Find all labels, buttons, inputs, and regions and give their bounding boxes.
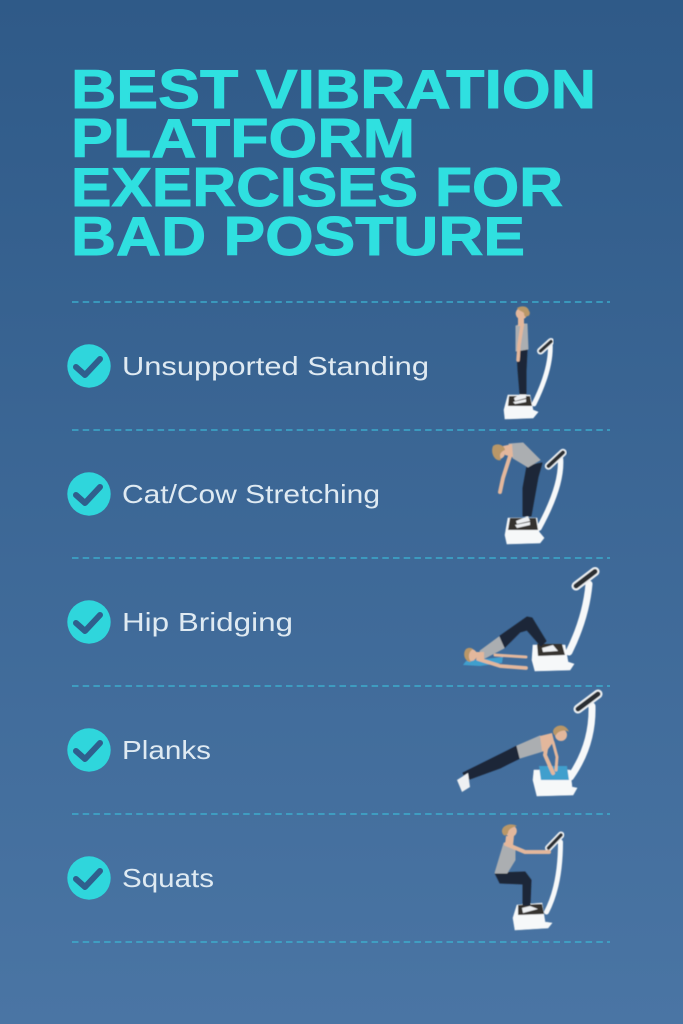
row: Squats — [67, 824, 561, 930]
title: PLATFORM — [71, 107, 415, 169]
figure: woman standing on vibration platform — [504, 306, 551, 419]
icon: check mark — [67, 856, 111, 900]
figure: woman in plank on vibration platform — [457, 694, 598, 796]
icon: check mark — [67, 472, 111, 516]
label: Unsupported Standing: Unsupported Standing — [122, 351, 429, 381]
row: Cat/Cow Stretching — [67, 443, 563, 544]
title: BAD POSTURE — [71, 205, 525, 267]
icon: check mark — [67, 600, 111, 644]
label: Hip Bridging: Hip Bridging — [122, 607, 293, 637]
label: Squats: Squats — [122, 863, 214, 893]
row: Hip Bridging — [67, 572, 595, 671]
title: EXERCISES FOR — [71, 156, 563, 218]
title — [71, 58, 596, 267]
icon: check mark — [67, 728, 111, 772]
label: Cat/Cow Stretching: Cat/Cow Stretching — [122, 479, 380, 509]
row: Planks — [67, 694, 598, 796]
row: Unsupported Standing — [67, 306, 551, 419]
figure: woman bending forward on vibration platform — [492, 443, 563, 544]
label: Planks: Planks — [122, 735, 211, 765]
figure: woman in hip bridge on vibration platform — [463, 572, 595, 671]
title: BEST VIBRATION — [71, 58, 596, 120]
icon: check mark — [67, 344, 111, 388]
figure: woman squatting on vibration platform — [495, 824, 561, 930]
